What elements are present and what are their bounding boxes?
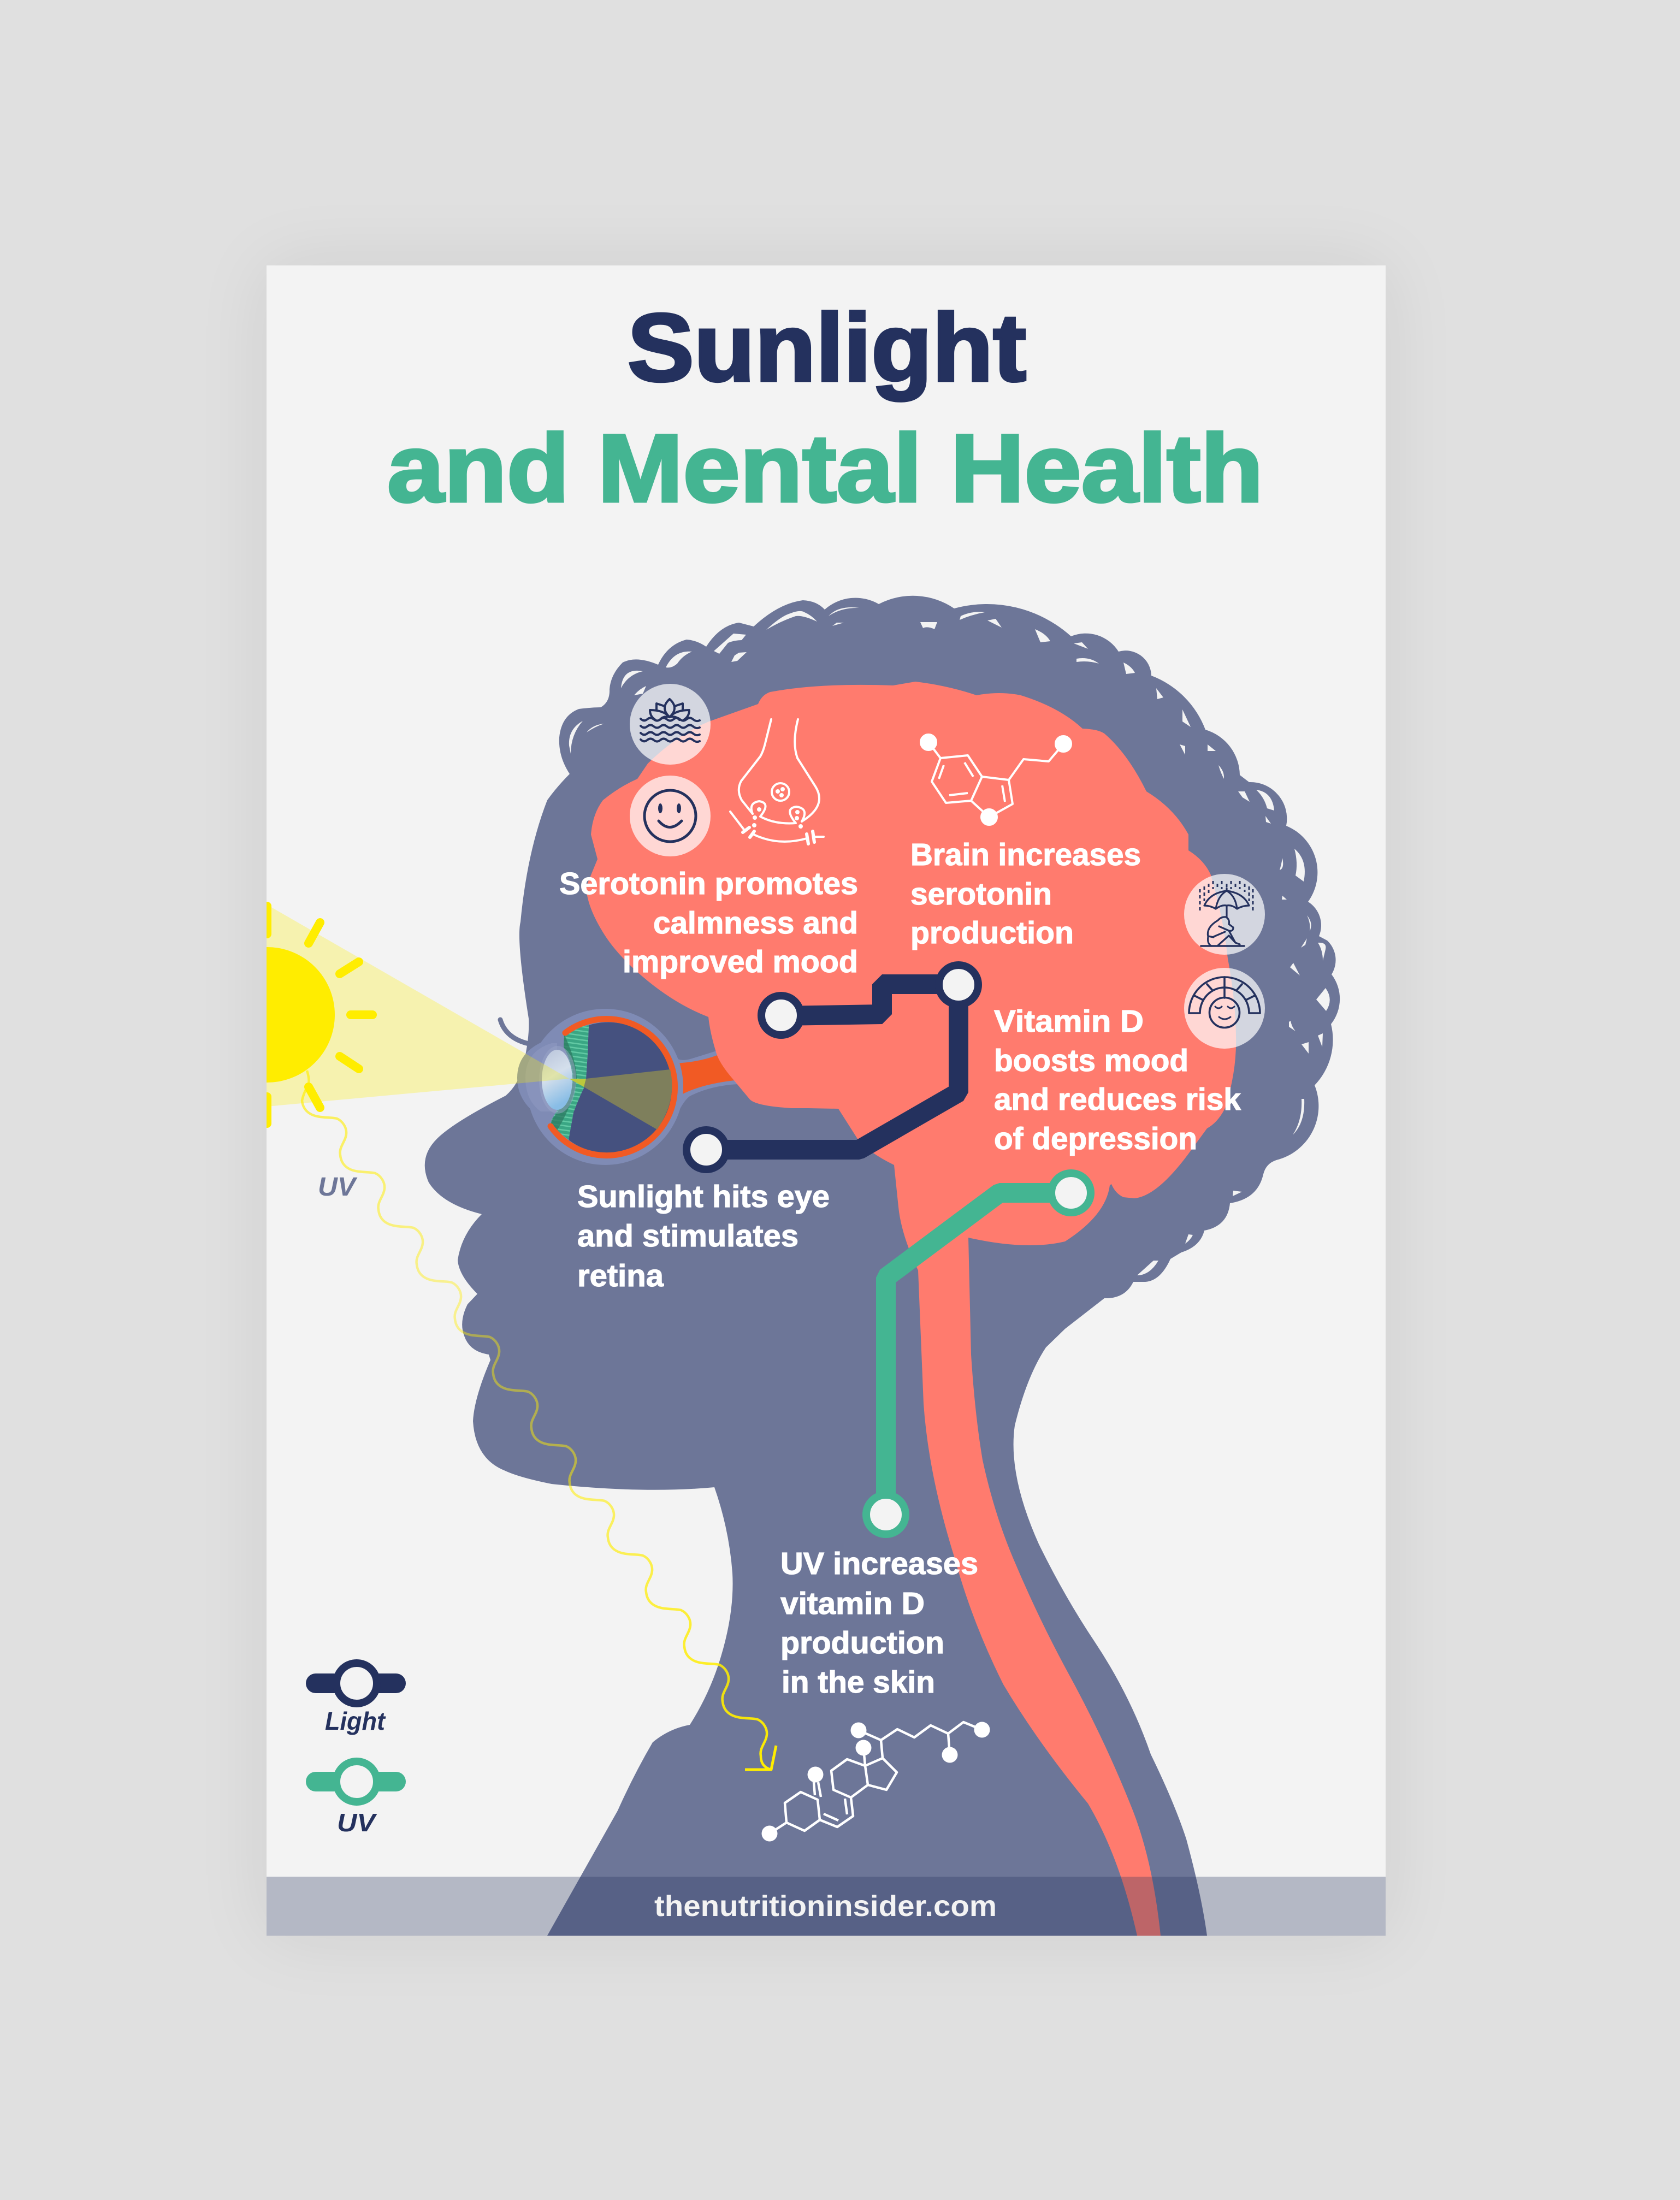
refracted light beam xyxy=(584,1069,672,1129)
text: serotonin promotes calmness: calmness and xyxy=(653,906,858,941)
cornea xyxy=(517,1038,557,1115)
UV node: brain xyxy=(1051,1173,1091,1213)
UV pathway xyxy=(866,1173,1091,1534)
text: vitamin D boosts mood: of depression xyxy=(994,1121,1197,1156)
retina ring xyxy=(551,1019,675,1156)
sun xyxy=(199,906,372,1123)
UV label: UV xyxy=(318,1173,358,1202)
brain xyxy=(586,682,1236,1936)
light node: retina xyxy=(687,1130,726,1169)
legend: light xyxy=(316,1663,396,1735)
eyelid xyxy=(500,1020,529,1044)
text: vitamin D boosts mood: boosts mood xyxy=(994,1043,1188,1078)
text: UV increases vitamin D: production xyxy=(780,1625,944,1660)
text: UV increases vitamin D: vitamin D xyxy=(780,1586,925,1621)
text: sunlight hits eye: Sunlight hits eye xyxy=(577,1179,830,1214)
legend: light: Light xyxy=(325,1707,386,1735)
ciliary body xyxy=(551,1025,589,1140)
text: UV increases vitamin D: UV increases xyxy=(780,1546,978,1581)
icon: vitamin D molecule xyxy=(761,1722,990,1842)
text: sunlight hits eye xyxy=(577,1179,830,1293)
text: serotonin promotes calmness: improved mood xyxy=(623,944,858,979)
UV wave xyxy=(302,1071,776,1770)
icon: umbrella and person in rain xyxy=(1184,874,1265,955)
icon: lotus xyxy=(630,684,711,765)
optic nerve and sheath xyxy=(678,1051,737,1108)
text: vitamin D boosts mood: Vitamin D xyxy=(994,1004,1144,1039)
title xyxy=(389,310,1258,504)
text: brain increases serotonin: production xyxy=(910,915,1074,950)
text: brain increases serotonin: Brain increases xyxy=(910,837,1141,872)
text: serotonin promotes calmness xyxy=(559,866,858,979)
text: brain increases serotonin: serotonin xyxy=(910,877,1052,912)
title: and Mental Health xyxy=(387,415,1263,522)
icon: serotonin molecule xyxy=(921,735,1071,825)
footer website: thenutritioninsider.com xyxy=(654,1890,997,1923)
infographic artwork xyxy=(267,310,1386,1936)
text: vitamin D boosts mood xyxy=(994,1004,1241,1156)
focal point xyxy=(569,1079,586,1087)
eye interior xyxy=(569,1022,674,1154)
legend: UV xyxy=(316,1761,396,1837)
lens xyxy=(539,1046,576,1114)
text: vitamin D boosts mood: and reduces risk xyxy=(994,1082,1241,1117)
light pathway xyxy=(687,965,978,1169)
footer band xyxy=(267,1877,1386,1936)
head silhouette with hair xyxy=(425,596,1340,1936)
UV arrowhead xyxy=(745,1746,776,1770)
icon: neuron synapse xyxy=(730,719,824,844)
text: serotonin promotes calmness: Serotonin promotes xyxy=(559,866,858,901)
UV node: skin xyxy=(866,1495,906,1534)
text: sunlight hits eye: retina xyxy=(577,1258,664,1293)
text: brain increases serotonin xyxy=(910,837,1141,950)
icon: mood gauge xyxy=(1184,968,1265,1049)
poster background xyxy=(267,265,1386,1936)
eye sheath xyxy=(527,1009,683,1165)
text: UV increases vitamin D xyxy=(780,1546,978,1700)
eye xyxy=(500,1009,683,1165)
title: Sunlight xyxy=(628,294,1026,401)
sun light beam xyxy=(267,904,569,1107)
light node: serotonin xyxy=(761,996,801,1035)
icon: smiley xyxy=(630,776,711,856)
hair strand gaps xyxy=(569,607,1330,1275)
text: sunlight hits eye: and stimulates xyxy=(577,1219,798,1253)
legend: UV: UV xyxy=(337,1808,377,1837)
text: UV increases vitamin D: in the skin xyxy=(782,1665,935,1700)
light node: brain xyxy=(939,965,978,1004)
